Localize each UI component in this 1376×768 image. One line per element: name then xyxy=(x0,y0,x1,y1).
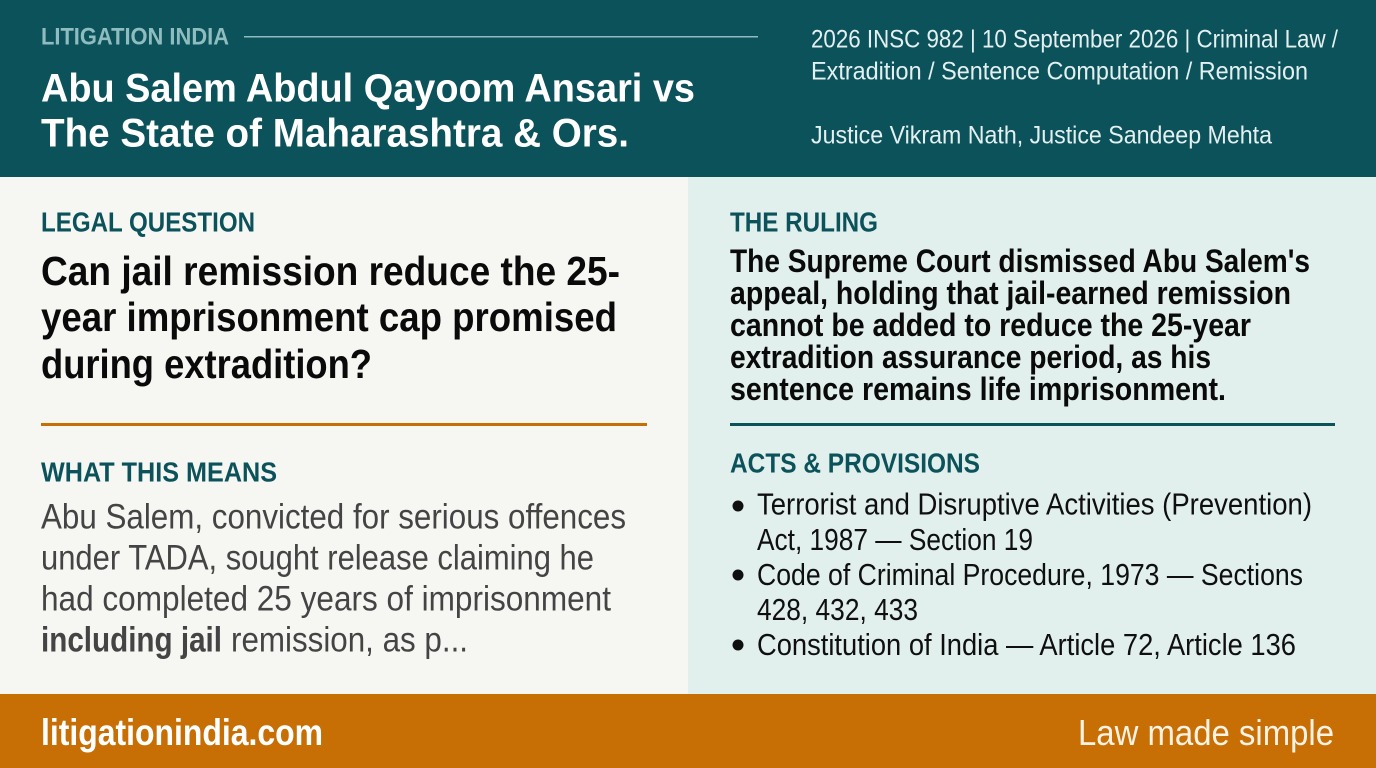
explanation text: had completed 25 years of imprisonment xyxy=(41,580,611,618)
explanation text: including jail xyxy=(41,620,222,660)
panel: the ruling xyxy=(730,206,1335,662)
panel: footer xyxy=(0,694,1376,768)
teal divider xyxy=(730,423,1335,426)
provisions list: Code of Criminal Procedure, 1973 — Sections xyxy=(757,557,1303,592)
brand label: LITIGATION INDIA xyxy=(41,24,229,50)
heading: the ruling: THE RULING xyxy=(730,206,878,238)
provisions list xyxy=(732,486,1312,662)
question text: during extradition? xyxy=(41,341,372,387)
panel: left background xyxy=(0,177,688,694)
provisions list: Act, 1987 — Section 19 xyxy=(757,522,1033,557)
case citation and topics: Extradition / Sentence Computation / Remission xyxy=(811,58,1308,86)
title: Abu Salem Abdul Qayoom Ansari vs xyxy=(41,66,695,110)
panel: right background xyxy=(688,177,1376,694)
explanation text: remission, as p... xyxy=(231,620,468,660)
explanation text: Abu Salem, convicted for serious offences xyxy=(41,498,626,536)
header rule xyxy=(244,36,758,38)
ruling text: appeal, holding that jail-earned remission xyxy=(730,275,1291,311)
explanation text xyxy=(41,498,626,660)
provisions list: Terrorist and Disruptive Activities (Prevention) xyxy=(757,486,1312,522)
ruling text xyxy=(730,243,1310,407)
ruling text: sentence remains life imprisonment. xyxy=(730,371,1226,407)
provisions list: 428, 432, 433 xyxy=(757,592,918,627)
orange divider xyxy=(41,423,647,426)
website: litigationindia.com xyxy=(41,712,323,753)
heading: acts and provisions: ACTS & PROVISIONS xyxy=(730,448,980,478)
explanation text: under TADA, sought release claiming he xyxy=(41,538,594,578)
question text xyxy=(41,248,620,387)
heading: what this means: WHAT THIS MEANS xyxy=(41,456,277,488)
tagline: Law made simple xyxy=(1078,712,1334,753)
panel: legal question xyxy=(41,206,647,660)
provisions list: Constitution of India — Article 72, Article 136 xyxy=(757,627,1296,662)
ruling text: cannot be added to reduce the 25-year xyxy=(730,307,1251,343)
question text: year imprisonment cap promised xyxy=(41,294,617,340)
judges: Justice Vikram Nath, Justice Sandeep Mehta xyxy=(811,122,1272,150)
ruling text: extradition assurance period, as his xyxy=(730,339,1211,375)
title xyxy=(41,66,695,156)
panel: header xyxy=(0,0,1376,177)
case citation and topics xyxy=(811,26,1338,86)
title: The State of Maharashtra & Ors. xyxy=(41,112,629,156)
heading: legal question: LEGAL QUESTION xyxy=(41,206,255,238)
question text: Can jail remission reduce the 25- xyxy=(41,248,620,294)
ruling text: The Supreme Court dismissed Abu Salem's xyxy=(730,243,1310,279)
